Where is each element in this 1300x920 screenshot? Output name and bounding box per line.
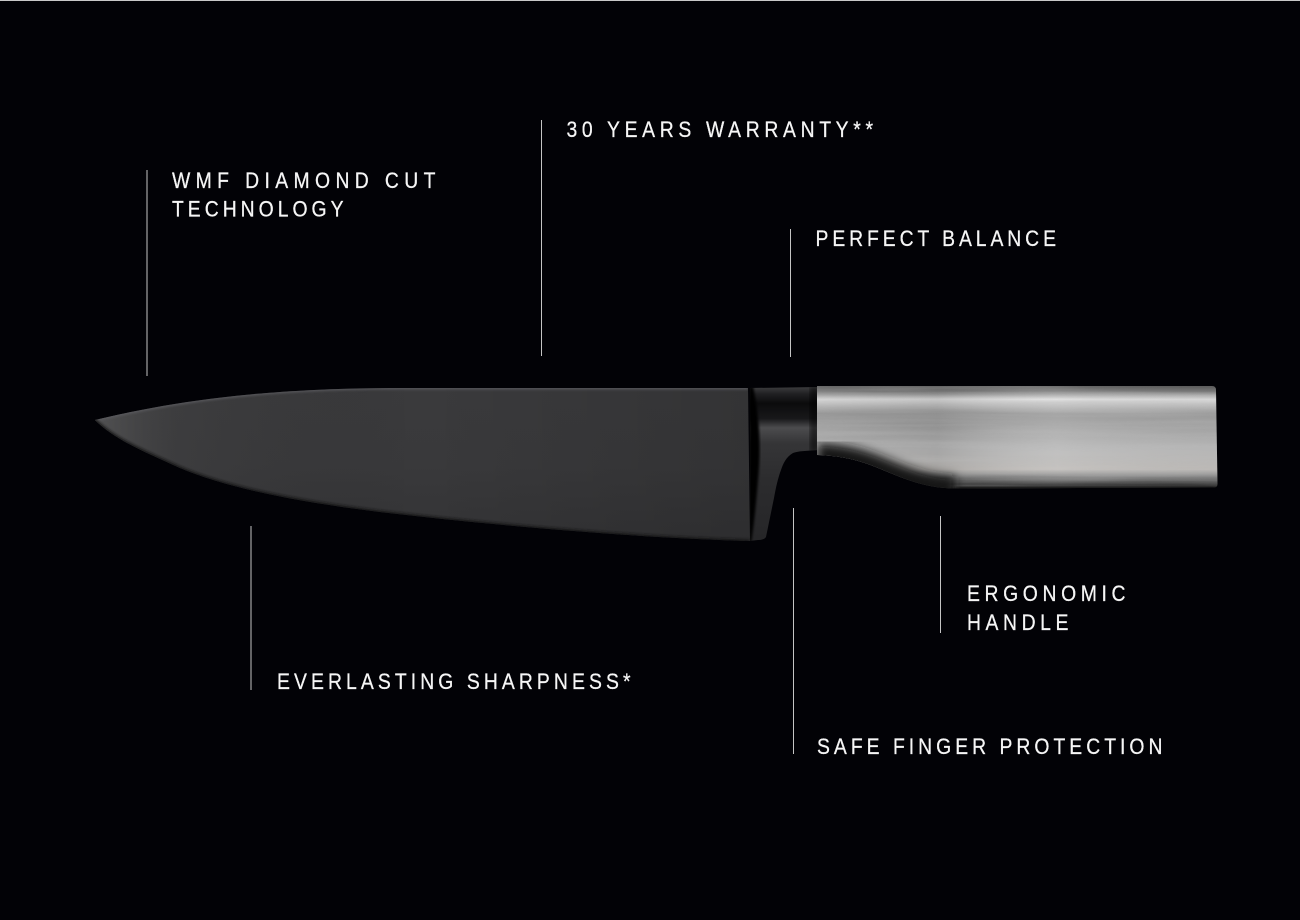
knife bolster bbox=[748, 385, 820, 543]
knife illustration bbox=[90, 384, 1220, 545]
callout: WMF diamond cut technology: WMF DIAMOND CUT bbox=[172, 169, 436, 193]
callout: safe finger protection: SAFE FINGER PROTECTION bbox=[817, 735, 1162, 759]
knife blade bbox=[90, 385, 755, 545]
callout: perfect balance: PERFECT BALANCE bbox=[816, 227, 1056, 251]
callout: ergonomic handle: ERGONOMIC bbox=[967, 582, 1126, 606]
callout: WMF diamond cut technology bbox=[146, 169, 436, 376]
callout: ergonomic handle: HANDLE bbox=[967, 611, 1068, 635]
callout: WMF diamond cut technology: TECHNOLOGY bbox=[172, 197, 344, 222]
callout: everlasting sharpness: EVERLASTING SHARPNESS* bbox=[277, 670, 630, 694]
knife handle bbox=[815, 384, 1220, 490]
callout: ergonomic handle bbox=[940, 516, 1126, 635]
callout: 30 years warranty: 30 YEARS WARRANTY** bbox=[566, 118, 873, 142]
